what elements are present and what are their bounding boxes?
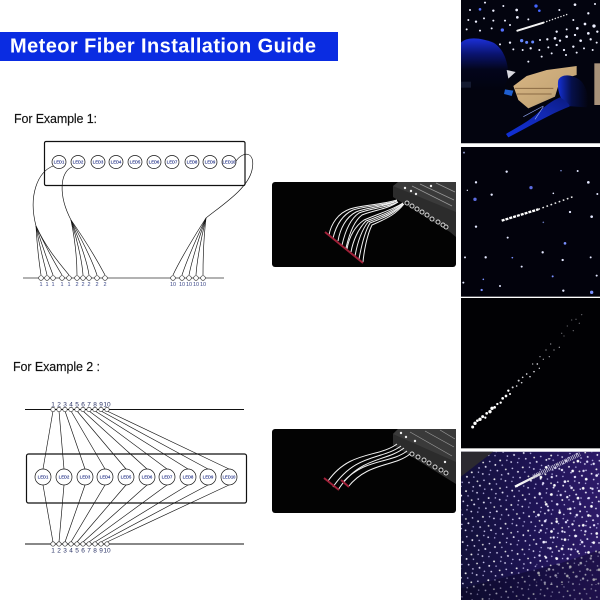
controller box with LED ports and fibers: LED5: [121, 474, 132, 480]
controller box with LED ports: LED1: [54, 160, 65, 164]
top rail: [25, 408, 244, 410]
controller box with LED ports and fibers: LED8: [183, 474, 194, 480]
rear window view: [513, 66, 577, 108]
bottom rail, end points and numbers: 10: [103, 548, 111, 554]
end point numbers: 2: [75, 282, 79, 288]
end point numbers: 2: [81, 282, 85, 288]
end point numbers: 10: [179, 282, 185, 288]
top end points and numbers: [51, 402, 111, 412]
product photo: example 2: [272, 429, 456, 513]
controller box with LED ports: LED8: [187, 160, 198, 164]
controller box with LED ports: LED4: [111, 160, 122, 164]
end point numbers: 1: [67, 282, 71, 288]
baseline with fiber end points: [23, 276, 224, 280]
end point numbers: 10: [193, 282, 199, 288]
ceiling stars: [466, 2, 598, 63]
controller box with LED ports: LED6: [149, 160, 160, 164]
heading: example 2: For Example 2 :: [13, 360, 100, 374]
title banner: [0, 32, 338, 61]
controller box with LED ports: LED7: [167, 160, 178, 164]
end point numbers: 2: [95, 282, 99, 288]
controller box with LED ports and fibers: LED10: [222, 474, 236, 480]
controller box with LED ports and fibers: [26, 411, 246, 542]
end point numbers: 1: [39, 282, 43, 288]
photo: meteor streak on black: [461, 298, 600, 448]
controller box with LED ports and fibers: LED9: [203, 474, 214, 480]
controller box with LED ports: LED5: [130, 160, 141, 164]
title banner: Meteor Fiber Installation Guide: [10, 36, 316, 58]
top end points and numbers: 1: [51, 402, 55, 408]
bottom rail, end points and numbers: 8: [93, 548, 97, 554]
end point numbers: 10: [200, 282, 206, 288]
end point numbers: 1: [51, 282, 55, 288]
photo: star ceiling with bright meteor: [461, 147, 600, 297]
end point numbers: 1: [45, 282, 49, 288]
fiber bundles: [33, 154, 253, 275]
bottom rail, end points and numbers: 3: [63, 548, 67, 554]
end point numbers: 10: [186, 282, 192, 288]
controller box with LED ports: LED9: [205, 160, 216, 164]
wiring diagram: example 1: [23, 142, 253, 288]
bottom rail, end points and numbers: 6: [81, 548, 85, 554]
controller box with LED ports: [44, 142, 245, 186]
top end points and numbers: 6: [81, 402, 85, 408]
product photo: example 1: [272, 182, 456, 267]
controller box with LED ports: LED3: [93, 160, 104, 164]
wiring diagram: example 2: [25, 402, 246, 554]
fibers with red tips: [325, 200, 404, 263]
top end points and numbers: 8: [93, 402, 97, 408]
bottom rail, end points and numbers: 4: [69, 548, 73, 554]
controller box with LED ports and fibers: LED6: [142, 474, 153, 480]
top end points and numbers: 7: [87, 402, 91, 408]
fibers with red tips: [324, 444, 410, 490]
bottom rail, end points and numbers: [25, 542, 244, 554]
bottom rail, end points and numbers: 7: [87, 548, 91, 554]
controller box with LED ports and fibers: LED2: [59, 474, 70, 480]
top end points and numbers: 9: [99, 402, 103, 408]
top end points and numbers: 5: [75, 402, 79, 408]
controller box with LED ports and fibers: LED7: [162, 474, 173, 480]
controller box with LED ports and fibers: LED3: [80, 474, 91, 480]
photo: purple starry ceiling with meteor: [461, 452, 600, 600]
top end points and numbers: 3: [63, 402, 67, 408]
bottom rail, end points and numbers: 1: [51, 548, 55, 554]
photo: car ceiling with meteor: [461, 0, 600, 143]
end point numbers: 1: [60, 282, 64, 288]
controller box with LED ports and fibers: LED1: [38, 474, 49, 480]
controller box with LED ports and fibers: LED4: [100, 474, 111, 480]
controller device: [393, 429, 456, 484]
end point numbers: 2: [103, 282, 107, 288]
bottom rail, end points and numbers: 5: [75, 548, 79, 554]
bottom rail, end points and numbers: 9: [99, 548, 103, 554]
top end points and numbers: 4: [69, 402, 73, 408]
end point numbers: [39, 282, 206, 288]
controller box with LED ports: LED10: [222, 160, 236, 164]
top end points and numbers: 10: [103, 402, 111, 408]
heading: example 1: For Example 1:: [14, 112, 97, 126]
controller device: [393, 182, 456, 237]
meteor trail: [517, 23, 543, 31]
bottom rail, end points and numbers: 2: [57, 548, 61, 554]
interior blue highlights: [461, 38, 508, 77]
end point numbers: 2: [87, 282, 91, 288]
end point numbers: 10: [170, 282, 176, 288]
top end points and numbers: 2: [57, 402, 61, 408]
controller box with LED ports: LED2: [73, 160, 84, 164]
